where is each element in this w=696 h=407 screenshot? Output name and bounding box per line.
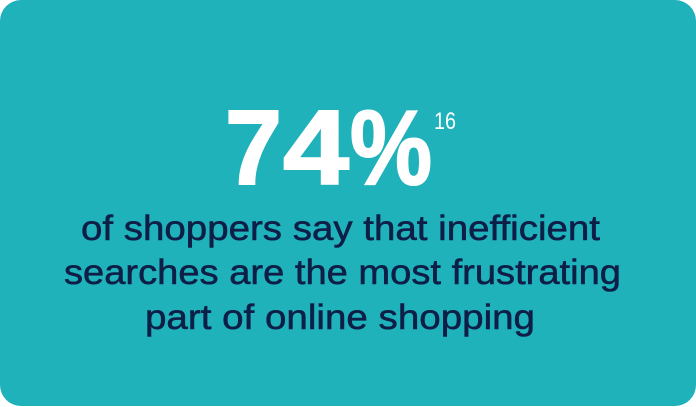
description text: searches are the most frustrating [64, 253, 621, 292]
headline statistic: 74% [225, 89, 432, 207]
description text [64, 209, 621, 337]
description text: of shoppers say that inefficient [81, 209, 600, 248]
headline statistic: 74%: 4 [283, 89, 349, 207]
headline statistic: 74%: % [350, 89, 432, 207]
headline statistic: 74%: 7 [225, 89, 282, 207]
description text: part of online shopping [145, 298, 535, 337]
footnote marker: 16: 16 [434, 108, 456, 135]
